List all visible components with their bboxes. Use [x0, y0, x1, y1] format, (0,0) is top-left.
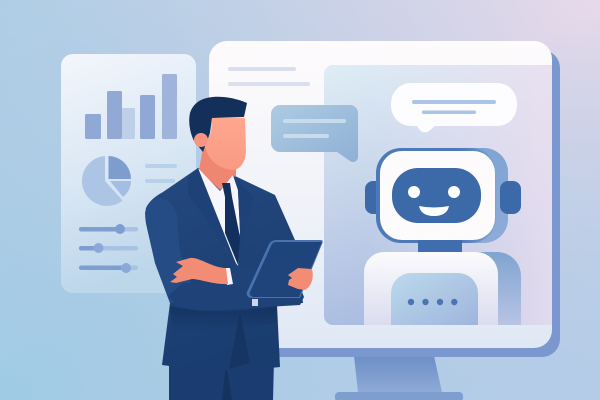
- shirt: [198, 168, 240, 266]
- bar chart: [85, 74, 177, 139]
- jacket hem shadow: [229, 312, 250, 369]
- robot body shadow: [470, 252, 521, 325]
- monitor stand: [335, 356, 463, 400]
- hand: crossed arm: [170, 258, 228, 284]
- shirt cuff: [224, 268, 233, 285]
- monitor screen: [324, 65, 552, 325]
- pie chart: [82, 156, 131, 206]
- jacket left lapel: [188, 168, 237, 266]
- panel: analytics dashboard: [61, 54, 196, 293]
- monitor: [209, 41, 560, 357]
- robot chest dots: [408, 299, 457, 305]
- speech bubble: user: [271, 105, 358, 162]
- robot smile: [419, 206, 449, 216]
- hair: [189, 97, 247, 152]
- monitor text lines: [228, 67, 310, 86]
- sliders: [79, 224, 138, 273]
- jacket shoulder highlight: [145, 198, 197, 303]
- robot head shadow: [395, 148, 508, 243]
- tablet: [247, 240, 323, 298]
- small shirt cuff: [252, 299, 258, 306]
- robot head: [376, 148, 496, 243]
- robot right ear: [500, 181, 521, 214]
- ear: [194, 133, 208, 147]
- businessman: [145, 97, 323, 400]
- robot visor: [392, 168, 481, 223]
- belly shadow: [170, 306, 277, 332]
- forearm: [168, 266, 304, 310]
- trousers: [169, 360, 274, 400]
- tie: [222, 183, 240, 265]
- robot left ear: [365, 181, 385, 214]
- legend lines: [145, 164, 177, 183]
- robot neck: [418, 240, 462, 253]
- robot chest panel: [391, 273, 478, 325]
- jacket: [145, 168, 303, 370]
- speech bubble: robot: [391, 83, 517, 132]
- robot: [364, 148, 521, 325]
- robot eyes: [408, 186, 460, 198]
- neck: [199, 148, 236, 190]
- hand: holding tablet: [288, 268, 313, 290]
- jacket right lapel: [233, 175, 253, 264]
- face: [205, 118, 246, 170]
- robot body: [364, 252, 498, 325]
